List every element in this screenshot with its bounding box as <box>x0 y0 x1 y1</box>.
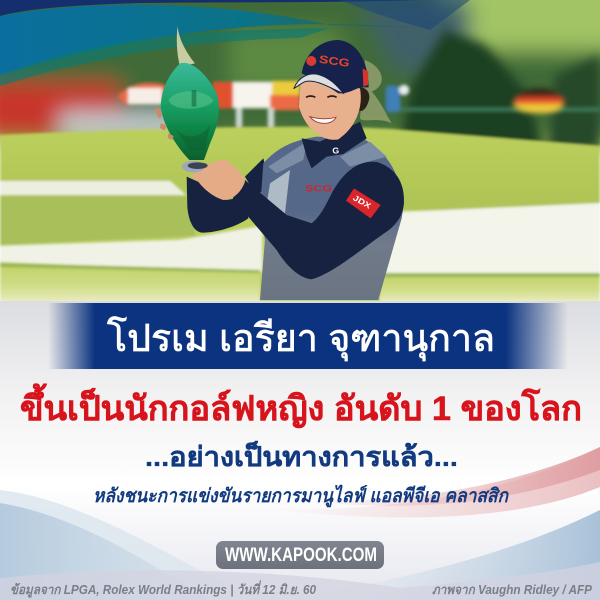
website pill: WWW.KAPOOK.COM <box>225 545 377 566</box>
hair <box>360 60 392 123</box>
headline: ขึ้นเป็นนักกอล์ฟหญิง อันดับ 1 ของโลก <box>20 383 582 429</box>
JDX patch <box>346 188 381 218</box>
trophy <box>161 26 219 172</box>
logo: vest SCG: SCG <box>305 184 332 194</box>
cap <box>302 40 369 93</box>
eyes <box>306 96 337 97</box>
light panel <box>267 170 290 213</box>
JDX patch: JDX <box>351 193 373 211</box>
hand <box>190 160 245 200</box>
vest <box>260 137 404 300</box>
right sleeve <box>233 162 404 279</box>
grass and paths <box>0 127 600 210</box>
vest highlight <box>268 142 387 173</box>
left sleeve (raised arm) <box>187 177 248 233</box>
arm cuff behind vest <box>245 158 270 197</box>
face <box>299 80 361 140</box>
subheadline: ...อย่างเป็นทางการแล้ว... <box>145 439 458 472</box>
title banner <box>48 303 568 369</box>
collar <box>302 122 367 168</box>
website pill <box>216 541 384 569</box>
detail line: หลังชนะการแข่งขันรายการมานูไลฟ์ แอลพีจีเอ คลาสสิก <box>93 484 509 508</box>
smile <box>310 117 336 123</box>
source credit: ข้อมูลจาก LPGA, Rolex World Rankings | วันที่ 12 มิ.ย. 60 <box>10 580 317 598</box>
title banner: โปรเม เอรียา จุฑานุกาล <box>107 316 495 361</box>
photo background: golf course <box>0 0 600 302</box>
bottom panel background <box>0 301 600 600</box>
top wave bands <box>0 0 470 86</box>
golfer with trophy: G <box>332 145 339 155</box>
cap logo SCG: SCG <box>318 54 350 70</box>
fingers <box>156 108 174 140</box>
golfer with trophy <box>156 26 404 300</box>
